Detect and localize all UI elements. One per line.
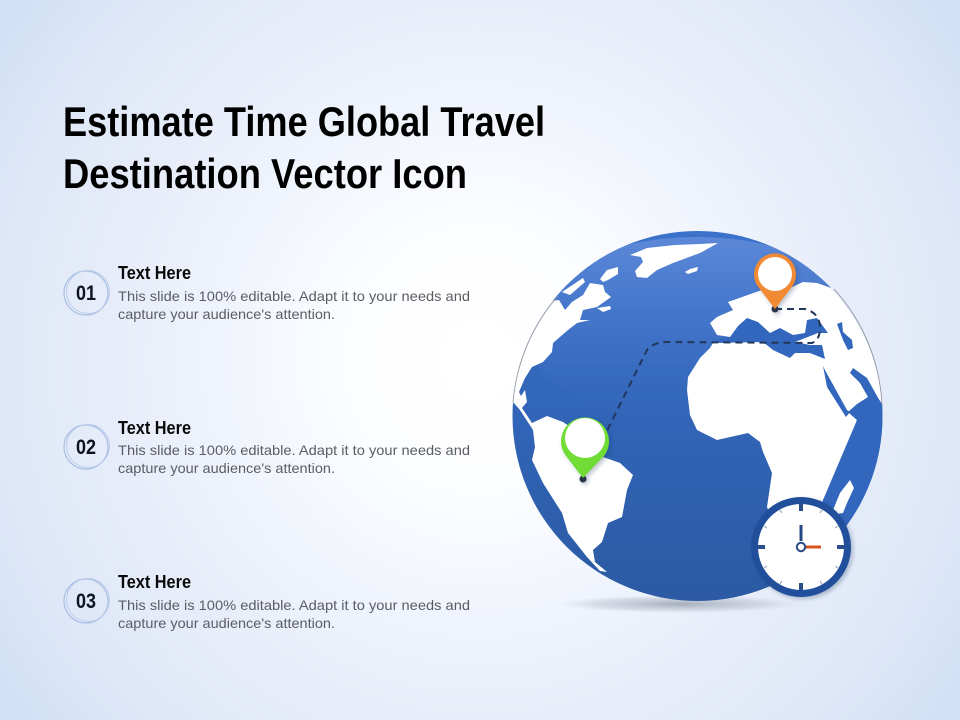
arctic strip island bbox=[562, 278, 585, 295]
indian ocean bbox=[823, 368, 882, 526]
title bbox=[63, 98, 545, 197]
seas bbox=[716, 318, 882, 526]
dashed route bbox=[583, 309, 820, 478]
number badge 01: 01 bbox=[76, 282, 96, 305]
caspian bbox=[837, 322, 853, 350]
globe bbox=[505, 231, 900, 601]
number badge 03: 03 bbox=[76, 590, 96, 613]
greenland bbox=[630, 243, 718, 278]
mediterranean bbox=[713, 318, 828, 359]
number badge 02 bbox=[64, 424, 110, 469]
clock face bbox=[751, 497, 851, 597]
list item 02 bbox=[64, 418, 470, 476]
item body text: This slide is 100% editable. Adapt it to your needs and bbox=[118, 442, 470, 458]
continents bbox=[505, 243, 900, 572]
item body text: This slide is 100% editable. Adapt it to your needs and bbox=[118, 288, 470, 304]
item heading: Text Here bbox=[118, 418, 191, 438]
green location pin bbox=[561, 417, 609, 482]
red sea bbox=[823, 366, 850, 417]
item body text bbox=[118, 442, 470, 476]
number badge 01 bbox=[64, 270, 110, 315]
ocean bbox=[512, 231, 882, 601]
list item 01 bbox=[64, 263, 470, 322]
item heading: Text Here bbox=[118, 263, 191, 283]
item body text: This slide is 100% editable. Adapt it to your needs and bbox=[118, 597, 470, 613]
item body text bbox=[118, 597, 470, 631]
title: Destination Vector Icon bbox=[63, 150, 467, 197]
globe shadow bbox=[558, 595, 802, 613]
highlight bbox=[528, 237, 867, 346]
item body text bbox=[118, 288, 470, 322]
orange location pin bbox=[754, 253, 796, 312]
item heading: Text Here bbox=[118, 572, 191, 592]
madagascar bbox=[833, 480, 854, 514]
number badge 03 bbox=[64, 578, 110, 623]
eurasia and africa bbox=[687, 282, 882, 510]
list item 03 bbox=[64, 572, 470, 631]
title: Estimate Time Global Travel bbox=[63, 98, 545, 145]
hour ticks bbox=[758, 504, 844, 590]
item body text: capture your audience's attention. bbox=[118, 615, 335, 631]
americas bbox=[505, 283, 633, 572]
item body text: capture your audience's attention. bbox=[118, 460, 335, 476]
globe edge bbox=[513, 289, 882, 405]
item body text: capture your audience's attention. bbox=[118, 306, 335, 322]
clock icon bbox=[751, 497, 851, 597]
arctic islands bbox=[685, 267, 698, 274]
number badge 02: 02 bbox=[76, 436, 96, 459]
clock hands bbox=[800, 525, 802, 541]
